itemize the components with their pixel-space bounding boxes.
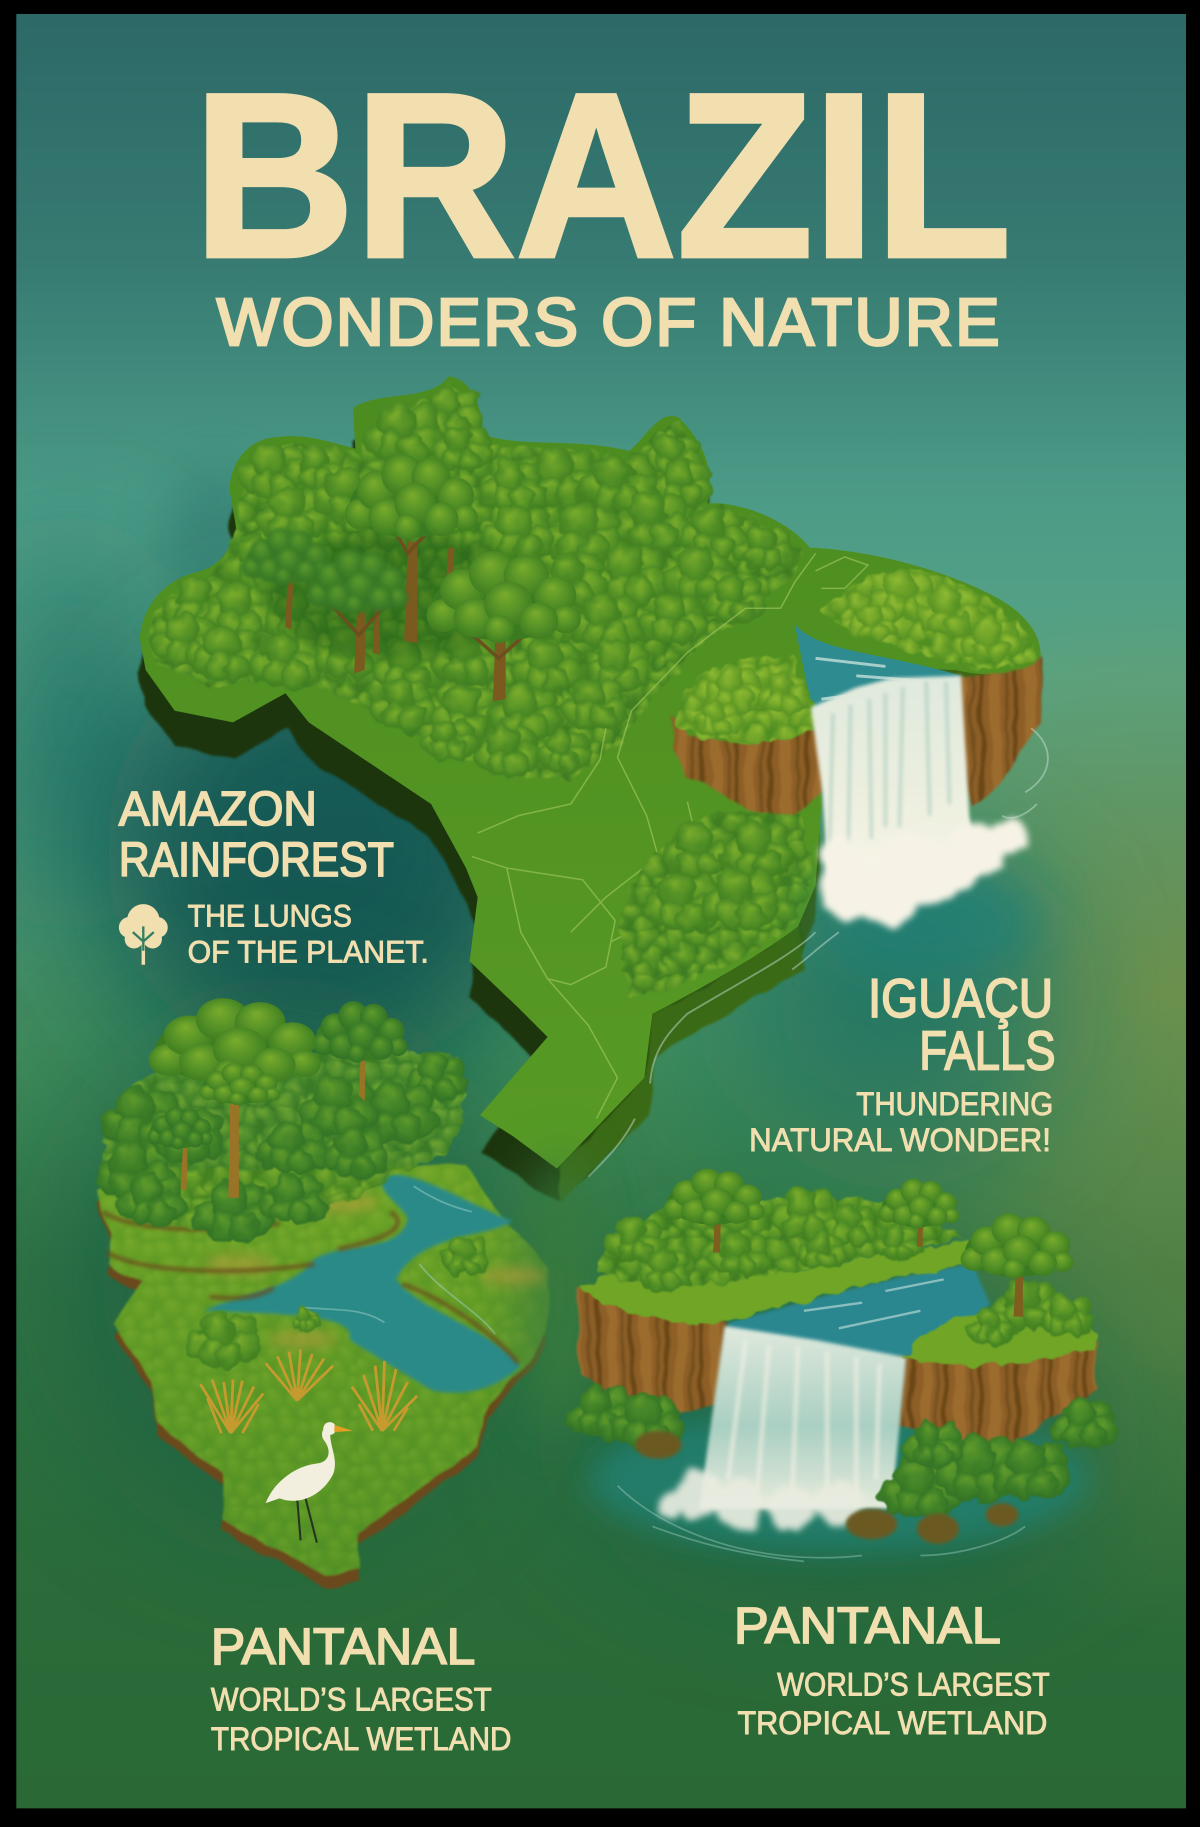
lower-right waterfall island (567, 1169, 1118, 1561)
Amazon description: THE LUNGS (188, 898, 352, 933)
lower bushes (567, 1385, 1118, 1521)
spray (656, 1470, 862, 1533)
southeastern forest (620, 806, 813, 996)
mist at base of falls (819, 819, 1029, 925)
right cliff (959, 655, 1043, 804)
subtitle: WONDERS OF NATURE (217, 286, 1000, 360)
map side wall (140, 411, 1041, 1204)
southeastern coastal wall (557, 926, 804, 1205)
Pantanal right description (737, 1665, 1050, 1741)
Iguaçu description: THUNDERING (856, 1085, 1053, 1122)
upper river (722, 1264, 990, 1357)
river rocks (635, 1431, 1018, 1544)
small shrubs (185, 1235, 490, 1368)
Iguaçu heading (868, 967, 1056, 1082)
right cliff (897, 1340, 1097, 1451)
label: Pantanal left (211, 1618, 511, 1757)
upper river (795, 623, 967, 728)
mud bank edges (103, 1212, 518, 1363)
Pantanal right heading: PANTANAL (734, 1597, 1001, 1654)
label: Amazon Rainforest (119, 783, 429, 969)
lobe forest above the left cliff (676, 656, 821, 743)
northern forest mass (149, 385, 804, 781)
wetland tall trees (147, 998, 407, 1198)
wetland blend into background (522, 1154, 597, 1433)
main waterfall: Iguaçu (588, 623, 1048, 1177)
reed tufts (200, 1349, 417, 1433)
Amazon description (188, 898, 429, 969)
Iguaçu heading: FALLS (919, 1020, 1056, 1082)
falling water (811, 676, 979, 903)
Pantanal left description: TROPICAL WETLAND (211, 1720, 511, 1757)
sandy patches (204, 1192, 545, 1349)
northeastern forest lobe (821, 570, 1037, 668)
Pantanal left heading: PANTANAL (211, 1618, 475, 1675)
left cliff (671, 711, 825, 816)
Pantanal right description: TROPICAL WETLAND (737, 1704, 1047, 1741)
wetland land mass (99, 1165, 548, 1587)
label: Pantanal right (734, 1597, 1050, 1741)
left cliff (579, 1288, 728, 1416)
map top surface (140, 376, 1041, 1169)
Iguaçu description (749, 1085, 1053, 1158)
forest canopy shade beneath the tall trees (268, 530, 524, 658)
lower-left wetland island: Pantanal (95, 998, 597, 1587)
Amazon heading (119, 783, 394, 887)
upper grass shelves (580, 1241, 1098, 1365)
grove tall trees (663, 1169, 1073, 1317)
Amazon heading: AMAZON (119, 783, 317, 836)
river (204, 1174, 521, 1393)
coastal wave lines (588, 728, 1048, 1177)
churned water glow (821, 862, 1043, 979)
Iguaçu description: NATURAL WONDER! (749, 1121, 1051, 1158)
white egret (266, 1422, 353, 1543)
wetland tree grove (95, 1049, 468, 1242)
pool (588, 1408, 1089, 1552)
Amazon description: OF THE PLANET. (188, 934, 429, 969)
illustrated map of Brazil (140, 376, 1041, 1205)
label: Iguaçu Falls (749, 967, 1056, 1158)
Pantanal left description (211, 1680, 511, 1757)
Pantanal right description: WORLD’S LARGEST (777, 1665, 1050, 1702)
grove (597, 1187, 1094, 1347)
river lines on map (472, 553, 868, 1119)
Iguaçu heading: IGUAÇU (868, 967, 1053, 1029)
Pantanal left description: WORLD’S LARGEST (211, 1680, 492, 1717)
title: BRAZIL (193, 44, 1011, 306)
Amazon heading: RAINFOREST (119, 834, 394, 887)
icon: tree (119, 904, 168, 965)
rainforest tall trees (242, 454, 581, 701)
falls (699, 1326, 906, 1509)
